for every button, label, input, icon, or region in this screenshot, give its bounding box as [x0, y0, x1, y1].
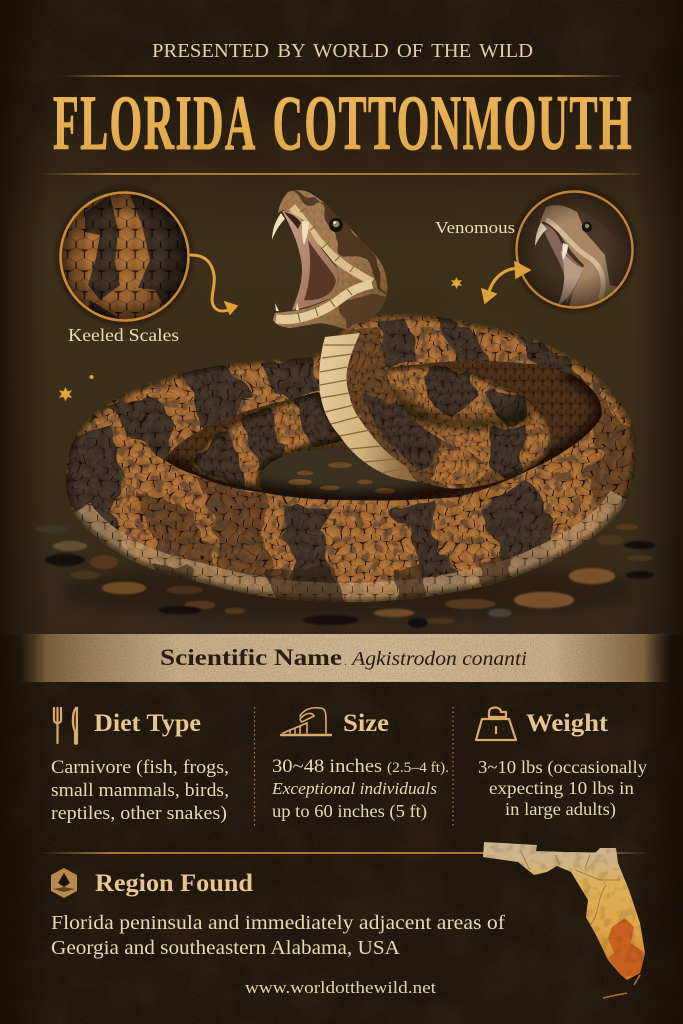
coiled snake body [66, 190, 636, 602]
size text: up to 60 inches (5 ft) [272, 801, 427, 822]
scientific name text: . [344, 657, 346, 668]
panel: size [271, 708, 449, 822]
heading: diet type: Diet Type [94, 710, 201, 737]
shading [66, 314, 636, 602]
inner hole shadow [165, 361, 602, 500]
outer coil [66, 314, 636, 602]
region text: Georgia and southeastern Alabama, USA [51, 937, 400, 959]
arrow: double-headed to medallion [482, 262, 530, 303]
icon: fork and knife [54, 708, 77, 744]
medallion: keeled scales [56, 188, 192, 324]
mottling [60, 310, 640, 610]
back left bands [105, 395, 175, 460]
eye [329, 218, 343, 232]
weight text: in large adults) [505, 799, 616, 819]
ventral edge [74, 500, 627, 602]
panel: diet type [51, 708, 229, 824]
banner: scientific name [20, 634, 670, 682]
inner right coil [386, 364, 553, 488]
size text [271, 756, 449, 822]
region text [51, 912, 505, 959]
size text: (2.5–4 ft). [387, 760, 449, 776]
scientific name text: Agkistrodon conanti [350, 649, 527, 670]
arrow: scales to body [191, 255, 237, 314]
diet text [51, 758, 229, 824]
stars [59, 277, 462, 401]
small head [540, 205, 618, 306]
fangs [272, 213, 285, 240]
diet text: Carnivore (fish, frogs, [51, 758, 229, 778]
panel: weight [476, 708, 647, 819]
presenter line: PRESENTED BY WORLD OF THE WILD [152, 40, 533, 62]
panel: region found [51, 868, 505, 959]
heading: weight: Weight [526, 710, 609, 737]
heading: region found: Region Found [95, 870, 253, 897]
size text: 30~48 inches [272, 756, 382, 777]
region text: Florida peninsula and immediately adjacent areas of [51, 912, 505, 934]
diet text: small mammals, birds, [51, 781, 229, 801]
ground with leaves and pebbles [36, 524, 656, 628]
weight text: expecting 10 lbs in [489, 778, 634, 798]
inner left coil [192, 392, 343, 490]
dark bands front [195, 475, 280, 600]
mouth interior [282, 211, 338, 310]
website url: www.worldotthewild.net [245, 978, 436, 997]
label: venomous: Venomous [435, 218, 515, 237]
scientific name text: Scientific Name [160, 645, 342, 670]
icon: hexagon badge [51, 868, 77, 898]
diet text: reptiles, other snakes) [51, 804, 227, 824]
weight text: 3~10 lbs (occasionally [478, 757, 647, 777]
icon: kettle weight [476, 708, 516, 740]
label: keeled scales: Keeled Scales [68, 325, 179, 345]
back right bands [378, 318, 417, 368]
icon: ruler and measuring tape [281, 708, 331, 735]
floor [260, 448, 436, 500]
heading: size: Size [343, 710, 389, 737]
weight text [478, 757, 647, 819]
snake head with open mouth [270, 188, 390, 333]
size text: Exceptional individuals [271, 779, 437, 798]
neck belly scutes [319, 333, 418, 482]
map of Florida [480, 840, 650, 998]
neck side scales [345, 327, 505, 488]
medallion: venomous head [510, 188, 640, 312]
